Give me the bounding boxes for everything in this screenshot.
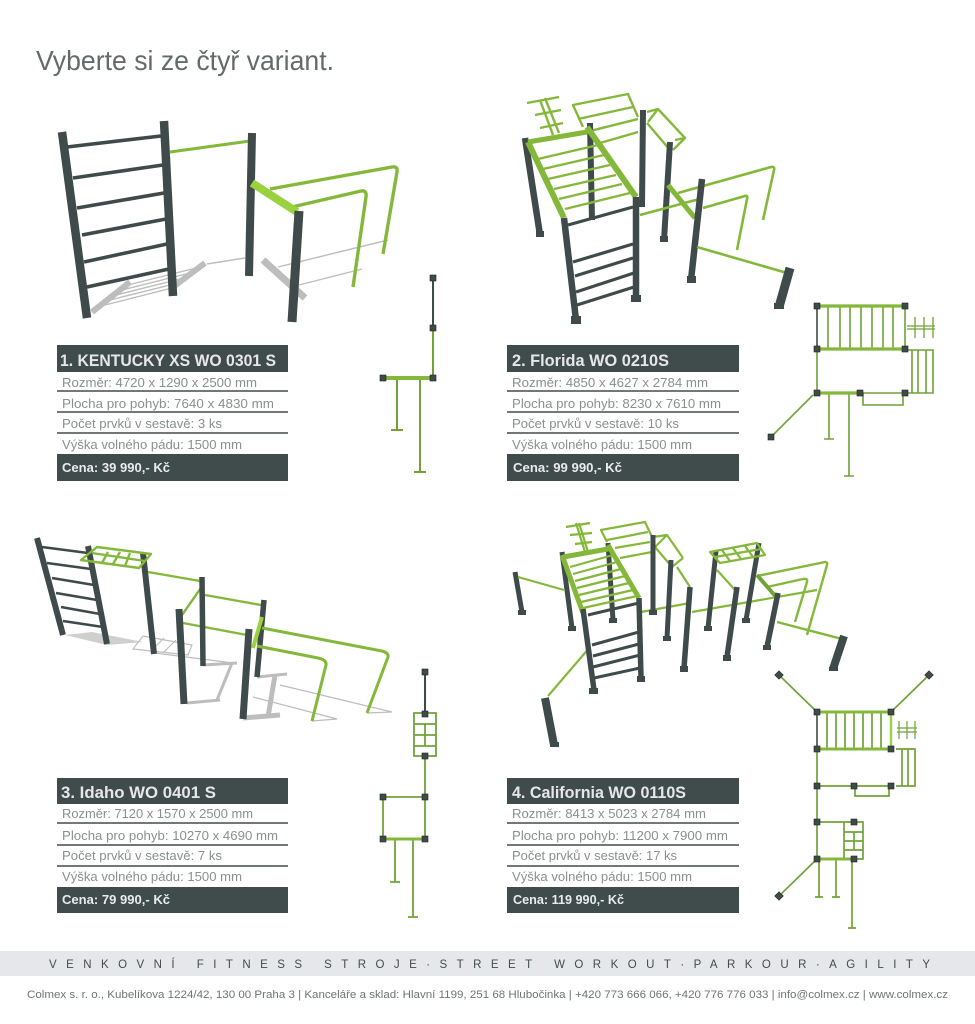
panel: Idaho 3D view	[37, 538, 392, 721]
table: Florida: Cena: 99 990,- Kč	[513, 461, 622, 475]
footer band: VENKOVNÍ FITNESS STROJE·STREET WORKOUT·PARKOUR·AGILITY	[49, 958, 930, 971]
table: Idaho: Výška volného pádu: 1500 mm	[62, 869, 242, 884]
plan: Kentucky	[380, 275, 436, 472]
table: Idaho: Plocha pro pohyb: 10270 x 4690 mm	[62, 828, 278, 843]
table: Florida: 2. Florida WO 0210S	[512, 351, 669, 370]
panel: Kentucky 3D view	[62, 121, 397, 322]
table: Kentucky: Plocha pro pohyb: 7640 x 4830 mm	[62, 396, 274, 411]
title: Vyberte si ze čtyř variant.	[36, 45, 334, 76]
table: Kentucky: Rozměr: 4720 x 1290 x 2500 mm	[62, 375, 257, 390]
table: Idaho	[57, 778, 288, 913]
table: Kentucky	[57, 345, 288, 481]
table: Florida	[507, 345, 739, 481]
table: Florida: Výška volného pádu: 1500 mm	[512, 437, 692, 452]
table: Kentucky: Cena: 39 990,- Kč	[62, 461, 170, 475]
plan: Idaho	[380, 669, 436, 917]
table: California: Výška volného pádu: 1500 mm	[512, 869, 692, 884]
table: California: Rozměr: 8413 x 5023 x 2784 mm	[512, 806, 706, 821]
table: Idaho: 3. Idaho WO 0401 S	[61, 783, 216, 802]
table: Florida: Plocha pro pohyb: 8230 x 7610 mm	[512, 396, 721, 411]
table: California: Plocha pro pohyb: 11200 x 7900 mm	[512, 828, 728, 843]
table: California: 4. California WO 0110S	[512, 783, 686, 802]
table: California: Počet prvků v sestavě: 17 ks	[512, 848, 677, 863]
table: Florida: Počet prvků v sestavě: 10 ks	[512, 416, 680, 431]
table: Kentucky: 1. KENTUCKY XS WO 0301 S	[60, 351, 276, 370]
table: Idaho: Počet prvků v sestavě: 7 ks	[62, 848, 223, 863]
table: Florida: Rozměr: 4850 x 4627 x 2784 mm	[512, 375, 708, 390]
table: California	[507, 778, 739, 913]
table: Kentucky: Počet prvků v sestavě: 3 ks	[62, 416, 223, 431]
panel: Florida 3D view	[525, 94, 790, 324]
panel: California 3D view	[515, 522, 844, 747]
table: Idaho: Cena: 79 990,- Kč	[62, 893, 170, 907]
plan: Florida	[768, 303, 935, 476]
plan: California	[775, 671, 933, 928]
footer contact line: Colmex s. r. o., Kubelíkova 1224/42, 130 00 Praha 3 | Kanceláře a sklad: Hlavní 1199, 251 68 Hlubočinka | +420 773 666 066, +420 776 776 033 | info@colmex.cz | www.colmex.cz	[27, 989, 948, 1001]
table: California: Cena: 119 990,- Kč	[513, 893, 624, 907]
table: Kentucky: Výška volného pádu: 1500 mm	[62, 437, 242, 452]
table: Idaho: Rozměr: 7120 x 1570 x 2500 mm	[62, 806, 253, 821]
footer band	[0, 951, 975, 976]
